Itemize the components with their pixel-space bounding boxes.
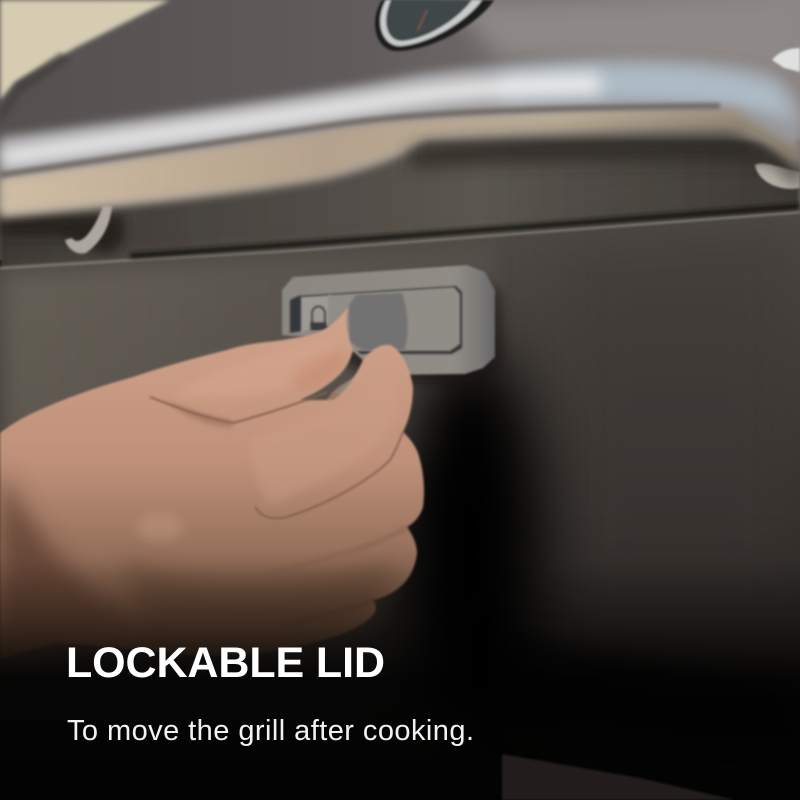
lower finger crease bbox=[272, 527, 407, 572]
thumb tip redness bbox=[286, 345, 350, 395]
thermometer gauge bbox=[375, 0, 494, 51]
lower hand shadow bbox=[120, 560, 400, 650]
handle dark reflection bbox=[0, 106, 720, 175]
bottom right grill edge bbox=[502, 754, 735, 800]
handle body bbox=[0, 59, 800, 216]
dark band below the handle bbox=[0, 140, 800, 270]
grill lid upper surface bbox=[0, 0, 800, 260]
latch bezel bbox=[282, 265, 495, 375]
dark shadow band lower right bbox=[500, 630, 800, 740]
palm shadow crease bbox=[150, 392, 327, 423]
handle warm band bbox=[0, 108, 800, 216]
handle blue sheen bbox=[500, 65, 800, 125]
finger crease bbox=[255, 432, 403, 518]
sliding thumb grip bbox=[349, 293, 408, 350]
palm crease soft shadow bbox=[165, 400, 232, 428]
handle bracket left bbox=[0, 216, 124, 256]
latch assembly bbox=[282, 265, 500, 382]
lock icon plate bbox=[301, 295, 332, 333]
handle bracket right bbox=[755, 48, 800, 189]
latch recess bbox=[290, 286, 462, 354]
knuckle highlight bbox=[136, 513, 184, 541]
hand bbox=[0, 307, 424, 660]
handle highlight bbox=[0, 84, 600, 158]
thumb highlight bbox=[170, 338, 335, 398]
latch shadow bbox=[300, 272, 500, 382]
wrist shadow bbox=[0, 470, 150, 660]
finger behind latch bbox=[325, 378, 362, 410]
title: LOCKABLE LID bbox=[66, 639, 385, 687]
bottom dark gradient bbox=[0, 560, 800, 800]
handle under shadow bbox=[410, 132, 800, 190]
metal gap between thumb and finger bbox=[335, 374, 362, 396]
front panel of grill bbox=[0, 206, 800, 800]
handle hook left bbox=[65, 206, 112, 254]
stainless steel handle bbox=[0, 59, 800, 216]
ring finger crease bbox=[285, 600, 373, 625]
index finger highlight bbox=[250, 377, 398, 505]
hand and wrist shape bbox=[0, 307, 424, 660]
subtitle: To move the grill after cooking. bbox=[67, 715, 474, 747]
sliding latch body bbox=[328, 287, 460, 351]
